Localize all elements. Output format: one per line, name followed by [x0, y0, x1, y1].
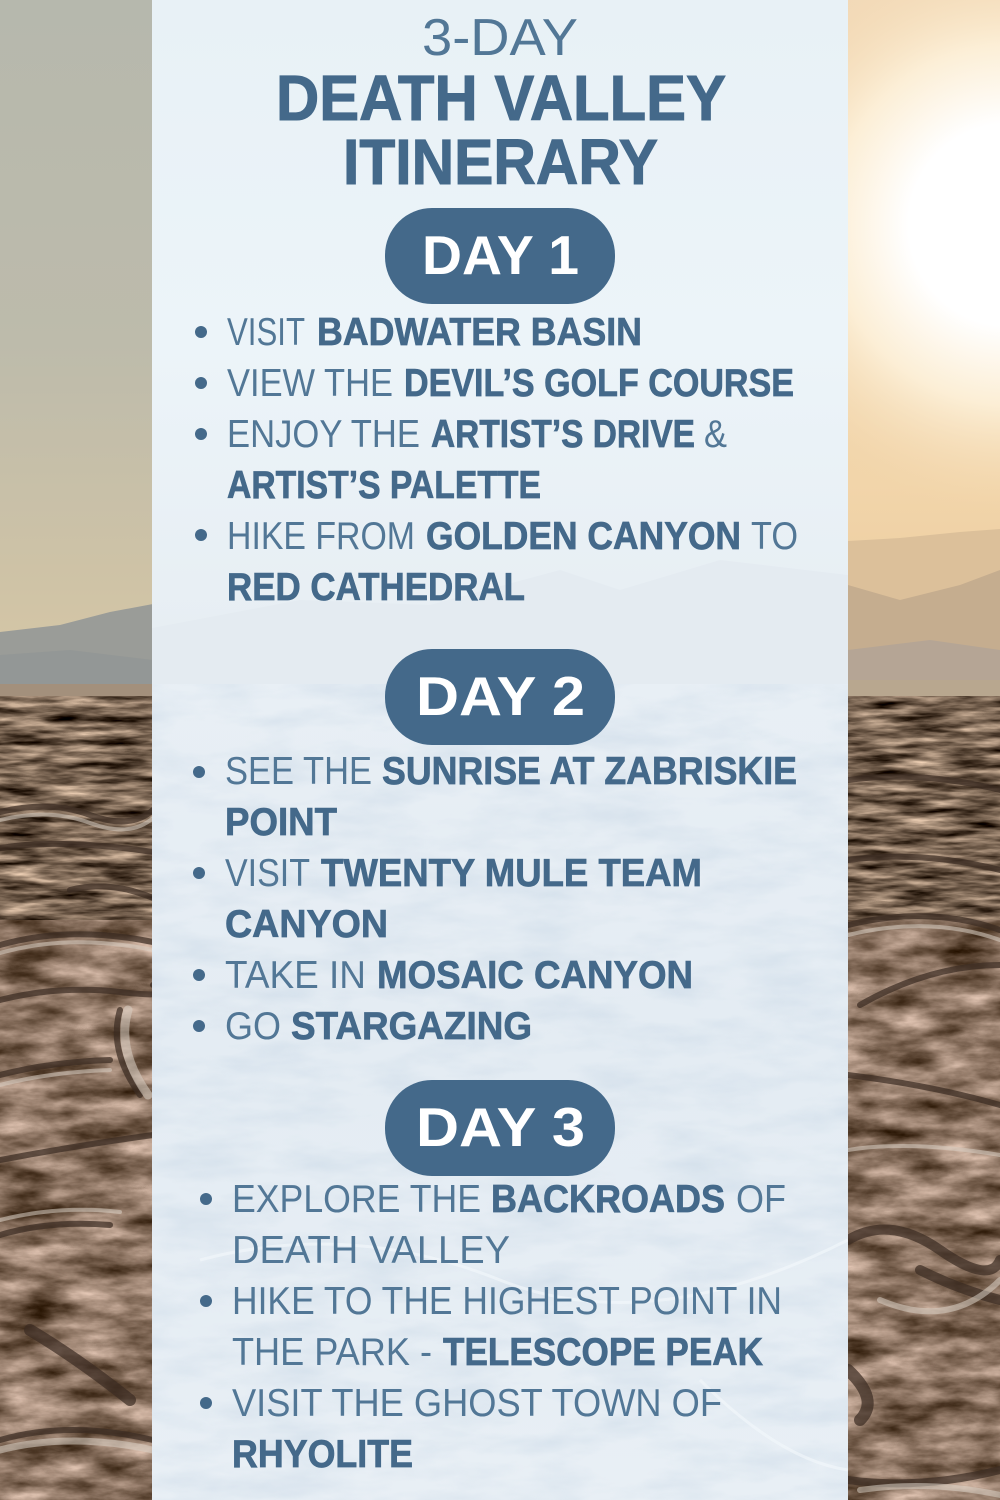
- day 3 list: DEATH VALLEY: [232, 1229, 510, 1272]
- day 1 badge: DAY 1: [422, 224, 579, 286]
- day 1 list: VIEW THE: [227, 362, 393, 405]
- day 3 list: RHYOLITE: [232, 1433, 413, 1476]
- day 2 list: CANYON: [225, 903, 388, 946]
- day 2 list: TWENTY MULE TEAM: [321, 852, 702, 895]
- day 1 list: &: [704, 413, 727, 456]
- day 2 list: MOSAIC CANYON: [377, 954, 693, 997]
- day 1 list: ARTIST’S PALETTE: [227, 464, 541, 507]
- day 1 list: [195, 311, 798, 609]
- day 2 list: SUNRISE AT ZABRISKIE: [382, 750, 797, 793]
- day 2 list: STARGAZING: [291, 1005, 532, 1048]
- day 3 list: TELESCOPE PEAK: [443, 1331, 763, 1374]
- day 2 list: TAKE IN: [225, 954, 366, 997]
- day 2 list: [193, 750, 797, 1048]
- title: [276, 9, 726, 198]
- day 2 badge: [385, 649, 615, 745]
- day 2 list: GO: [225, 1005, 281, 1048]
- day 1 list: RED CATHEDRAL: [227, 566, 525, 609]
- title line: ITINERARY: ITINERARY: [343, 126, 658, 198]
- day 1 list: ENJOY THE: [227, 413, 420, 456]
- day 3 list: [200, 1178, 786, 1476]
- title line: DEATH VALLEY: DEATH VALLEY: [276, 62, 726, 134]
- day 1 list: VISIT: [227, 311, 305, 354]
- day 2 list: VISIT: [225, 852, 310, 895]
- title line: 3-DAY: 3-DAY: [422, 9, 578, 67]
- day 1 list: HIKE FROM: [227, 515, 415, 558]
- day 1 list: DEVIL’S GOLF COURSE: [404, 362, 794, 405]
- day 1 list: GOLDEN CANYON: [426, 515, 741, 558]
- day 3 list: BACKROADS: [491, 1178, 725, 1221]
- day 1 list: ARTIST’S DRIVE: [431, 413, 695, 456]
- day 1 badge: [385, 208, 615, 304]
- day 3 list: THE PARK -: [232, 1331, 432, 1374]
- day 2 list: SEE THE: [225, 750, 372, 793]
- day 3 list: OF: [736, 1178, 786, 1221]
- day 1 list: BADWATER BASIN: [317, 311, 642, 354]
- day 3 list: HIKE TO THE HIGHEST POINT IN: [232, 1280, 782, 1323]
- day 3 list: VISIT THE GHOST TOWN OF: [232, 1382, 722, 1425]
- day 3 badge: DAY 3: [416, 1096, 585, 1158]
- day 1 list: TO: [751, 515, 798, 558]
- day 2 badge: DAY 2: [416, 665, 585, 727]
- day 3 badge: [385, 1080, 615, 1176]
- day 2 list: POINT: [225, 801, 337, 844]
- panel: translucent itinerary column: [152, 0, 848, 1500]
- day 3 list: EXPLORE THE: [232, 1178, 481, 1221]
